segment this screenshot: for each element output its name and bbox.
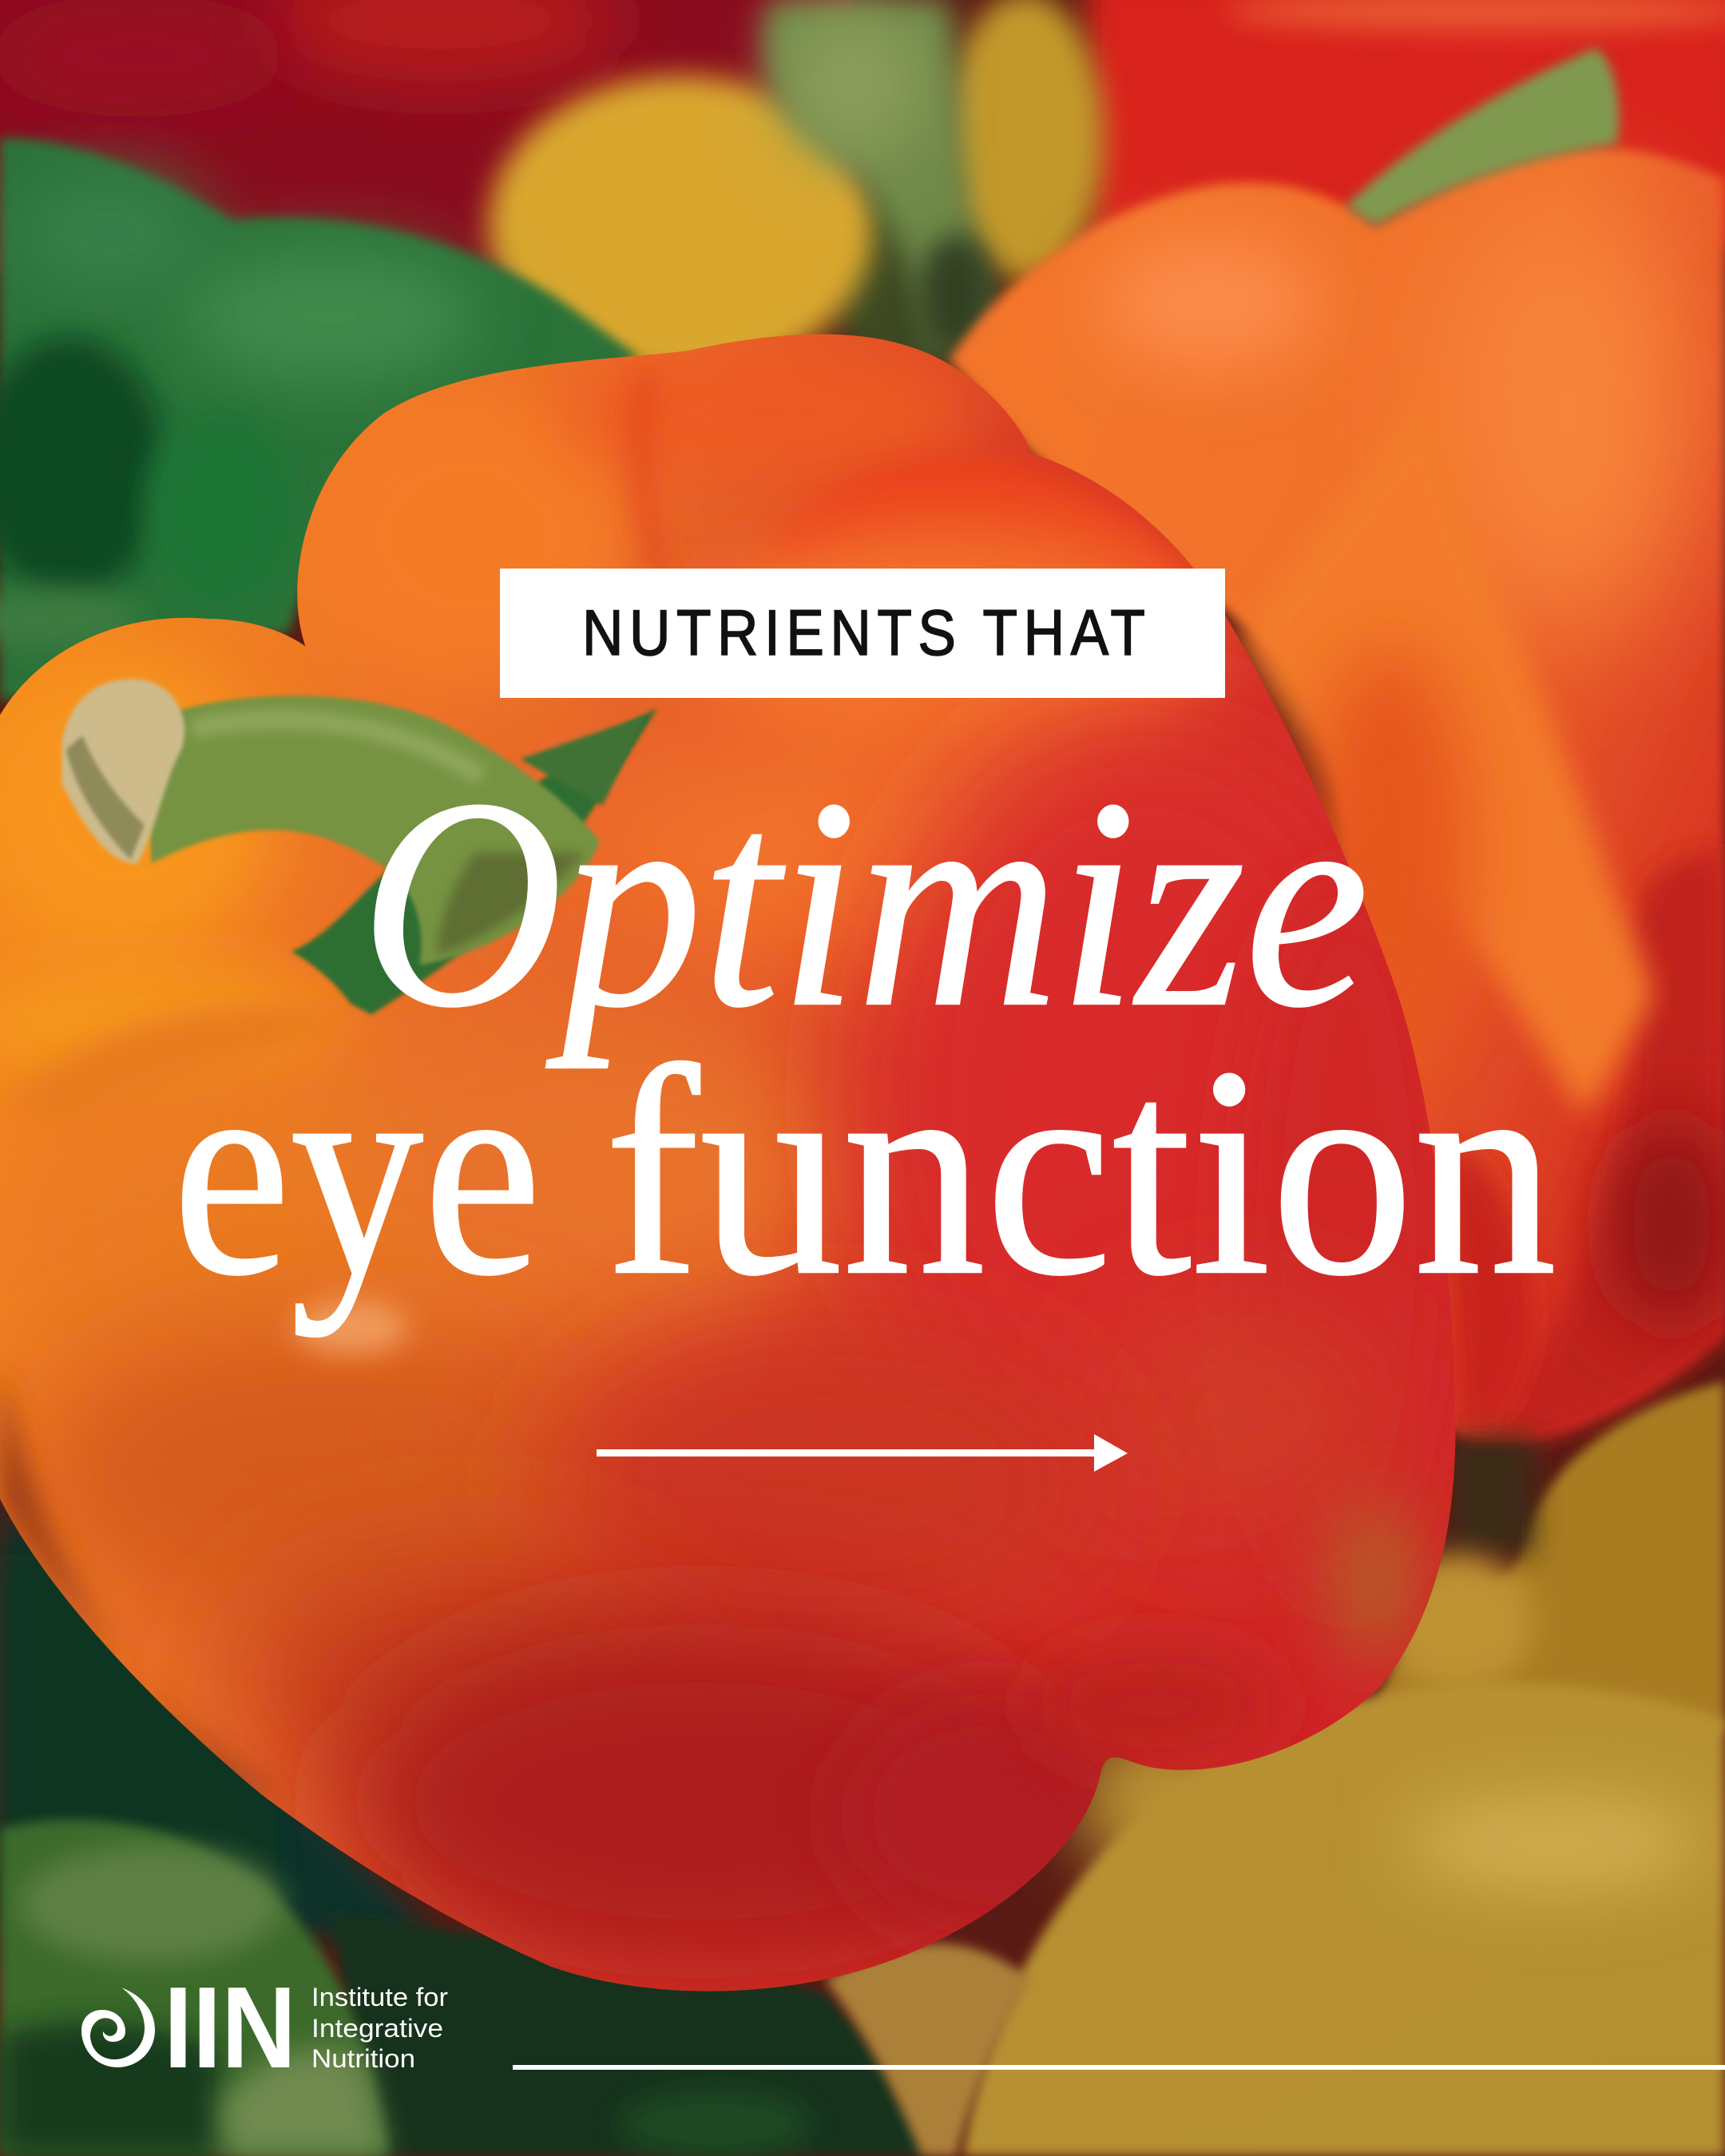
icon: spiral [81, 1988, 155, 2067]
yellow peppers bottom right [963, 1382, 1725, 2156]
lower body [550, 1334, 1100, 1636]
yellow peppers top [488, 0, 1104, 378]
green pepper top left [0, 137, 640, 701]
title: optimize eye function [172, 738, 1556, 1338]
main orange-red pepper [0, 335, 1458, 1992]
badge: nutrients that [500, 569, 1225, 698]
arrow [597, 1434, 1128, 1472]
badge: nutrients that: NUTRIENTS THAT [582, 597, 1145, 669]
left orange side [0, 660, 275, 962]
logo wordmark: Nutrition [311, 2044, 415, 2073]
logo wordmark [311, 1983, 448, 2073]
logo letters: IIN: IIN [164, 1963, 296, 2092]
title: optimize eye function: Optimize [361, 738, 1369, 1069]
stem and calyx of main pepper [62, 679, 657, 1015]
logo: Institute for Integrative Nutrition [81, 1963, 448, 2092]
green stem right pepper [1346, 48, 1619, 227]
right red side [866, 715, 1417, 1485]
title: optimize eye function: eye [172, 1006, 541, 1338]
green and pale peppers bottom left [0, 1499, 1032, 2156]
footer rule [513, 2065, 1725, 2070]
logo wordmark: Institute for [311, 1983, 448, 2011]
orange pepper right [950, 149, 1725, 1446]
upper lobes [303, 385, 632, 688]
title: optimize eye function: function [605, 1006, 1556, 1338]
logo wordmark: Integrative [311, 2014, 443, 2043]
